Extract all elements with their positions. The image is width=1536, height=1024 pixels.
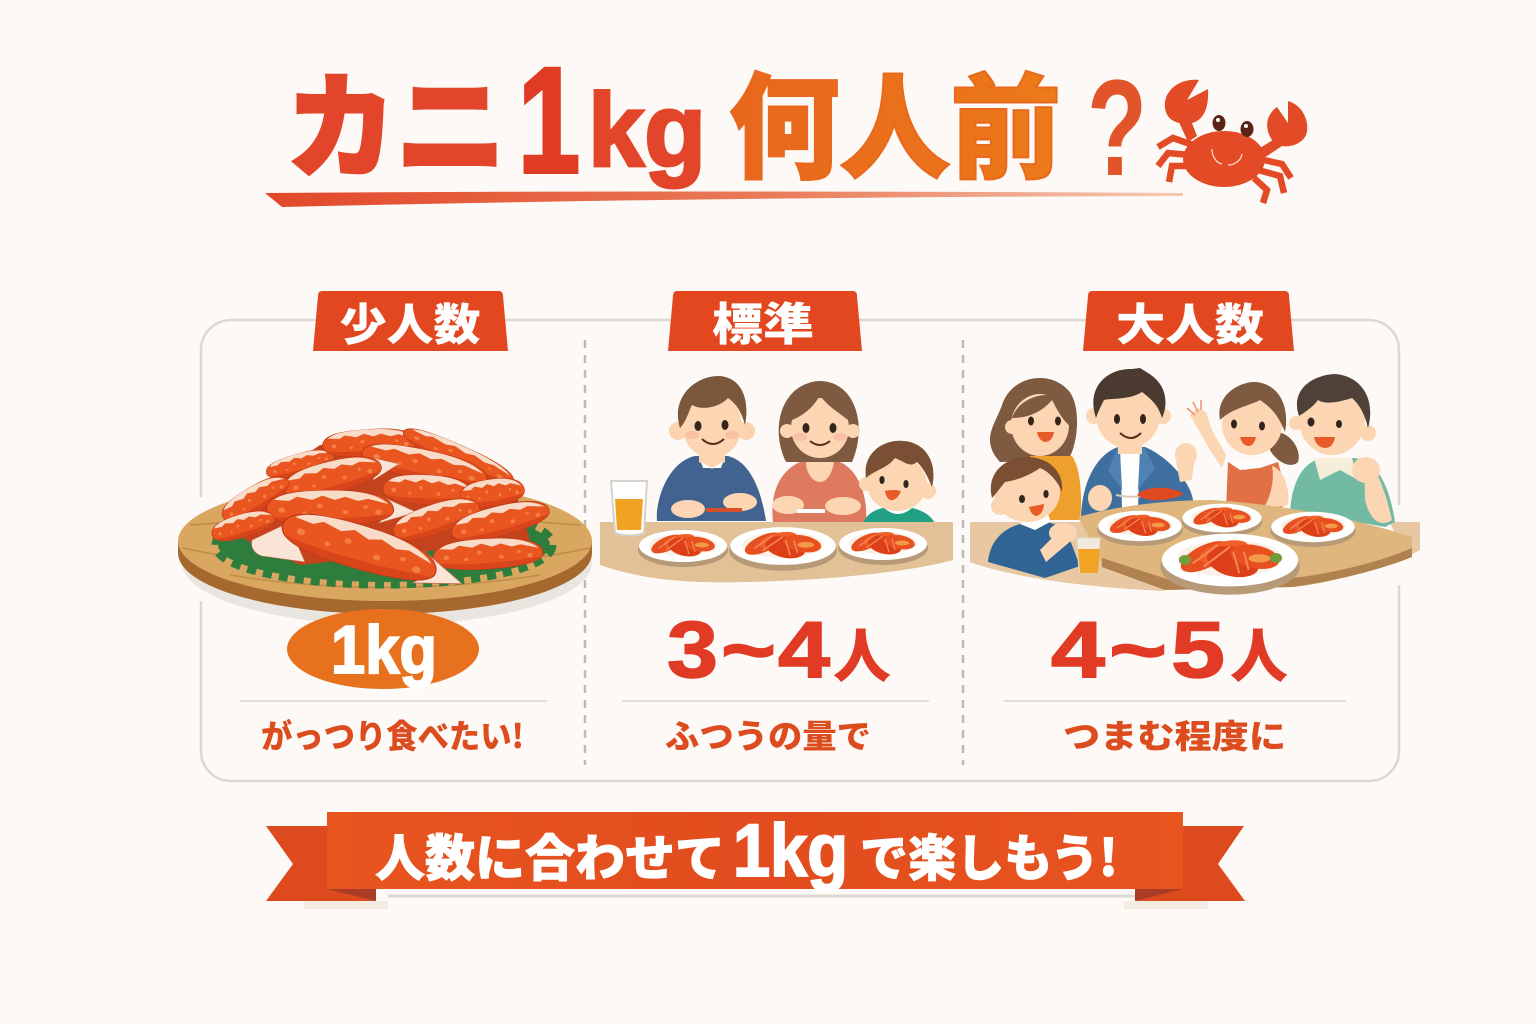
banner ribbon (266, 809, 1245, 909)
result: 3-4 people: 人 (833, 610, 891, 694)
caption: snack: つまむ程度に (1063, 710, 1286, 758)
result: 4-5 people: 4 (1051, 605, 1106, 694)
result: 3-4 people: ~ (721, 605, 776, 694)
person: father (657, 376, 766, 521)
tag: few people: 少人数 (340, 289, 480, 353)
person: child (859, 441, 936, 526)
person: girl waving (1187, 382, 1299, 510)
banner ribbon: 人数に合わせて (375, 819, 725, 891)
title (286, 36, 1147, 205)
result: 4-5 people (1051, 605, 1288, 694)
title: カニ (286, 36, 506, 201)
tag: standard: 標準 (712, 288, 814, 353)
banner ribbon: 1kg (733, 809, 848, 892)
plate: left (638, 530, 728, 567)
tag: few people (313, 289, 508, 353)
illustration: group of five at table (970, 368, 1420, 595)
banner ribbon: で楽しもう! (860, 819, 1118, 891)
table edge (970, 522, 1420, 591)
caption: hearty: がっつり食べたい! (261, 710, 524, 758)
person: mother (772, 381, 866, 522)
title underline (265, 192, 1183, 207)
plates (1097, 504, 1356, 595)
icon: crab (1158, 80, 1307, 203)
person: woman left (990, 378, 1081, 520)
result: 4-5 people: ~ (1109, 605, 1167, 694)
illustration: family of three at table (600, 376, 953, 582)
result: 4-5 people: 5 (1171, 605, 1225, 694)
wooden table (1078, 500, 1412, 590)
title: kg (588, 73, 706, 189)
table (600, 522, 953, 582)
tag: many people (1083, 289, 1294, 353)
plate: right (838, 528, 928, 565)
badge: 1kg (287, 609, 479, 689)
person: boy right (1289, 374, 1395, 527)
result: 4-5 people: 人 (1230, 610, 1288, 694)
result: 3-4 people: 3 (667, 605, 718, 694)
tag: standard (668, 288, 862, 353)
title: 何人前 (729, 37, 1061, 202)
person: man center (1081, 368, 1197, 516)
result: 3-4 people: 4 (778, 605, 831, 694)
badge: 1kg: 1kg (331, 612, 437, 688)
divider lines (240, 700, 1346, 702)
title: 1 (518, 36, 580, 204)
icon: juice glass (1077, 538, 1100, 573)
plate: center (729, 527, 837, 571)
panel: comparison frame (190, 320, 1410, 781)
icon: juice glass (611, 481, 647, 536)
title: ? (1087, 52, 1147, 205)
result: 3-4 people (667, 605, 891, 694)
person: child front (988, 457, 1080, 578)
tag: many people: 大人数 (1116, 289, 1264, 353)
caption: normal: ふつうの量で (665, 710, 871, 758)
illustration: crab legs on wooden board (178, 422, 592, 625)
